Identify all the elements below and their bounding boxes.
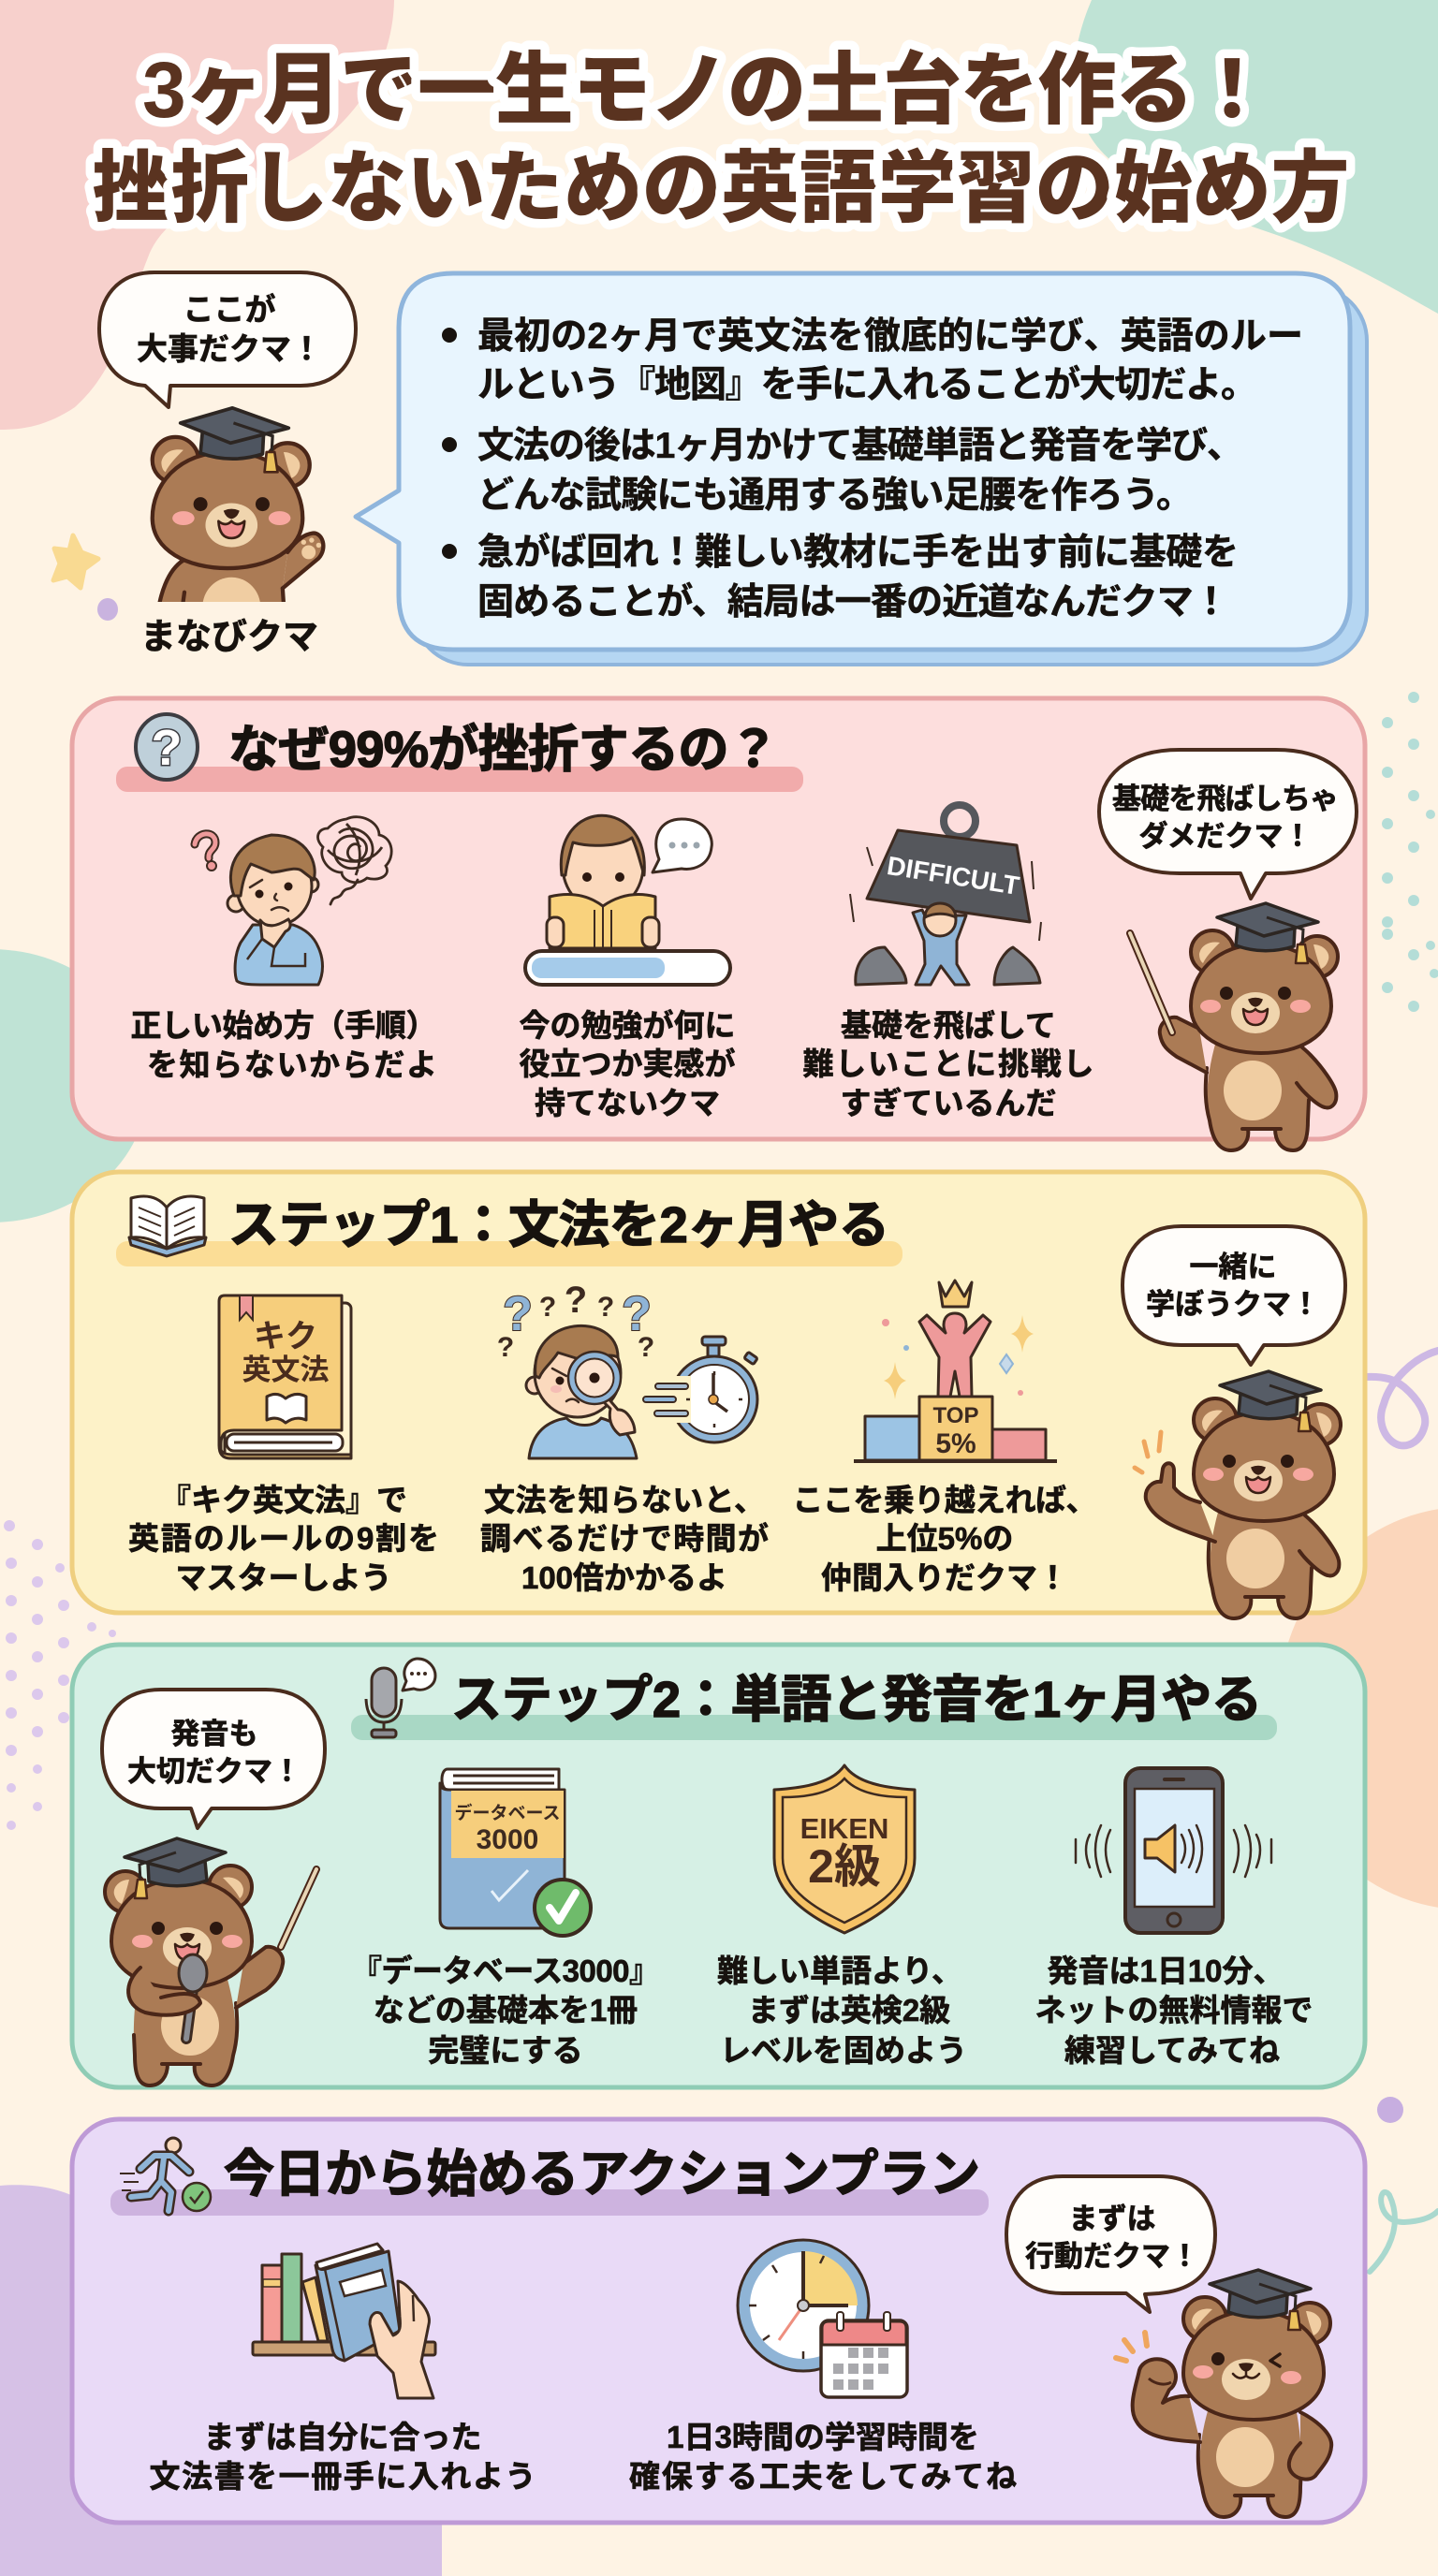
heading ribbon <box>110 2189 989 2216</box>
bear thumbs up <box>1135 1371 1341 1618</box>
heading: ステップ1：文法を2ヶ月やる <box>228 1197 889 1253</box>
text: vocab tip 1: 完璧にする <box>428 2033 583 2068</box>
icon: person with magnifier and stopwatch: ? <box>497 1332 514 1363</box>
text: vocab tip 3 <box>1035 1954 1313 2068</box>
panel: step 2 vocabulary and pronunciation <box>72 1645 1365 2087</box>
background dot: lilac small <box>97 598 118 621</box>
text: action 2 <box>629 2420 1017 2494</box>
background squiggle: purple <box>1365 1351 1438 1445</box>
heading: ステップ2：単語と発音を1ヶ月やる <box>451 1672 1262 1728</box>
text: cause 1: 正しい始め方（手順） <box>131 1008 436 1043</box>
bullet 1: 最初の2ヶ月で英文法を徹底的に学び、英語のルー <box>477 316 1303 357</box>
background blob: green left <box>0 949 148 1222</box>
text: grammar tip 1: マスターしよう <box>176 1560 391 1595</box>
text: action 1: まずは自分に合った <box>204 2420 481 2454</box>
title: 3ヶ月で一生モノの土台を作る！ <box>142 46 1271 134</box>
bear: まなびクマ <box>150 406 326 602</box>
icon: question mark <box>136 714 198 780</box>
text: grammar tip 3: 仲間入りだクマ！ <box>821 1560 1068 1595</box>
icon: EIKEN shield: EIKEN <box>800 1812 888 1845</box>
text: cause 3 <box>803 1008 1093 1120</box>
icon: データベース3000 book <box>440 1769 591 1936</box>
background dots: teal <box>1382 692 1438 1012</box>
text: grammar tip 1: 英語のルールの9割を <box>128 1521 439 1556</box>
bear with microphone and pointer <box>105 1838 316 2086</box>
icon: データベース3000 book: データベース <box>454 1802 561 1823</box>
text: vocab tip 2: 難しい単語より、 <box>717 1954 962 1988</box>
title <box>92 46 1350 232</box>
heading: なぜ99%が挫折するの？ <box>228 722 779 778</box>
icon: microphone <box>366 1659 435 1737</box>
text: vocab tip 1: などの基礎本を1冊 <box>374 1993 638 2027</box>
bullet 1 <box>442 316 1303 405</box>
bullet 3 <box>442 533 1239 622</box>
text: cause 2: 今の勉強が何に <box>519 1008 736 1043</box>
bullet 2: 文法の後は1ヶ月かけて基礎単語と発音を学び、 <box>477 426 1243 466</box>
speech bubble: 発音も <box>170 1718 258 1750</box>
icon: person with magnifier and stopwatch <box>497 1280 757 1458</box>
icon: confused person <box>195 817 391 985</box>
icon: person with magnifier and stopwatch: ? <box>539 1292 556 1323</box>
speech bubble: 行動だクマ！ <box>1025 2240 1199 2273</box>
text: cause 3: 基礎を飛ばして <box>841 1008 1056 1043</box>
icon: person lifting DIFFICULT weight <box>850 805 1041 985</box>
icon: open book <box>129 1196 206 1256</box>
text: grammar tip 1 <box>128 1483 439 1595</box>
icon: podium top 5% <box>854 1281 1057 1461</box>
name label: まなびクマ <box>140 618 318 657</box>
panel: why 99% fail <box>72 698 1365 1150</box>
text: grammar tip 2 <box>480 1483 769 1595</box>
background squiggle: teal <box>1370 2192 1438 2272</box>
icon: clock and calendar <box>738 2240 907 2397</box>
text: cause 3: 難しいことに挑戦し <box>803 1046 1093 1081</box>
icon: person with magnifier and stopwatch: ? <box>503 1287 533 1341</box>
text: cause 1 <box>131 1008 437 1082</box>
title: 挫折しないための英語学習の始め方 <box>92 144 1350 232</box>
bullet 2: どんな試験にも通用する強い足腰を作ろう。 <box>477 476 1193 516</box>
icon: podium top 5%: 5% <box>935 1428 976 1459</box>
text: grammar tip 1: 『キク英文法』で <box>160 1483 407 1517</box>
speech bubble: 基礎を飛ばしちゃ <box>1112 783 1339 815</box>
heading ribbon <box>116 1241 902 1266</box>
icon: person with magnifier and stopwatch: ? <box>565 1280 587 1321</box>
background blob: pink <box>0 0 394 430</box>
speech bubble: ダメだクマ！ <box>1138 820 1313 853</box>
heading: 今日から始めるアクションプラン <box>224 2146 980 2203</box>
background blob: green top right <box>1075 0 1438 314</box>
bullet 3: 急がば回れ！難しい教材に手を出す前に基礎を <box>477 533 1239 573</box>
background dot: purple <box>1377 2097 1403 2123</box>
text: action 1 <box>150 2420 536 2494</box>
background blob: peach right <box>1278 1507 1438 1910</box>
icon: キク英文法 book: 英文法 <box>242 1354 330 1386</box>
icon: reading person with progress bar <box>525 815 730 985</box>
text: grammar tip 3: 上位5%の <box>876 1521 1013 1556</box>
speech bubble <box>1099 750 1357 899</box>
text: cause 1: を知らないからだよ <box>147 1047 437 1082</box>
speech bubble <box>102 1690 325 1828</box>
icon: EIKEN shield <box>774 1765 915 1933</box>
text: cause 3: すぎているんだ <box>841 1086 1056 1120</box>
speech bubble: ここが大事だクマ: ここが <box>183 292 275 327</box>
text: cause 2: 役立つか実感が <box>519 1046 736 1081</box>
text: vocab tip 2: まずは英検2級 <box>748 1993 950 2027</box>
text: vocab tip 1: 『データベース3000』 <box>351 1954 660 1988</box>
text: grammar tip 2: 文法を知らないと、 <box>484 1483 765 1517</box>
text: grammar tip 3 <box>792 1483 1097 1595</box>
text: vocab tip 3: 練習してみてね <box>1064 2033 1280 2068</box>
text: vocab tip 2: レベルを固めよう <box>720 2033 967 2068</box>
heading ribbon <box>351 1715 1277 1740</box>
text: grammar tip 2: 100倍かかるよ <box>521 1560 727 1595</box>
text: vocab tip 3: ネットの無料情報で <box>1035 1993 1313 2027</box>
speech bubble: ここが大事だクマ <box>99 272 356 407</box>
panel: step 1 grammar <box>72 1172 1365 1618</box>
speech bubble <box>1123 1226 1345 1365</box>
speech bubble: 一緒に <box>1189 1251 1277 1283</box>
icon: データベース3000 book: 3000 <box>477 1824 538 1855</box>
text: action 2: 確保する工夫をしてみてね <box>629 2459 1017 2494</box>
icon: person with magnifier and stopwatch: ? <box>622 1287 652 1341</box>
icon: phone with sound <box>1076 1768 1271 1933</box>
background blob: purple bottom <box>0 2185 442 2576</box>
text: action 2: 1日3時間の学習時間を <box>667 2420 979 2454</box>
speech bubble: 大切だクマ！ <box>127 1755 301 1788</box>
text: cause 2: 持てないクマ <box>535 1086 720 1120</box>
speech bubble: ここが大事だクマ: 大事だクマ！ <box>137 331 322 366</box>
bear flexing with wink <box>1116 2270 1331 2517</box>
heading ribbon <box>116 767 803 792</box>
background dots: lilac <box>4 1520 116 1830</box>
bullet 2 <box>442 426 1243 516</box>
icon: キク英文法 book: キク <box>254 1319 317 1354</box>
icon: EIKEN shield: 2級 <box>808 1840 881 1893</box>
text: vocab tip 2 <box>717 1954 967 2068</box>
bullet 3: 固めることが、結局は一番の近道なんだクマ！ <box>477 582 1229 622</box>
icon: person with magnifier and stopwatch: ? <box>597 1292 614 1323</box>
text: vocab tip 1 <box>351 1954 660 2068</box>
icon: question mark: ? <box>152 720 182 776</box>
text: grammar tip 2: 調べるだけで時間が <box>480 1521 769 1556</box>
icon: runner with check <box>120 2138 211 2211</box>
text: grammar tip 3: ここを乗り越えれば、 <box>792 1483 1097 1517</box>
speech bubble: まずは <box>1069 2203 1155 2235</box>
icon: podium top 5%: TOP <box>933 1403 978 1428</box>
panel: summary box <box>356 273 1367 665</box>
text: cause 2 <box>519 1008 736 1120</box>
mascot intro: bear with speech bubble <box>99 272 356 657</box>
icon: キク英文法 book <box>219 1295 351 1458</box>
panel: action plan <box>72 2119 1365 2523</box>
icon: person with magnifier and stopwatch: ? <box>638 1332 654 1363</box>
bullet 1: ルという『地図』を手に入れることが大切だよ。 <box>477 365 1257 405</box>
speech bubble <box>1006 2176 1215 2312</box>
icon: books on shelf with hand <box>253 2244 435 2398</box>
bear with pointer <box>1130 903 1338 1150</box>
speech bubble: 学ぼうクマ！ <box>1146 1288 1320 1321</box>
icon: person lifting DIFFICULT weight: DIFFICULT <box>885 851 1021 900</box>
text: action 1: 文法書を一冊手に入れよう <box>150 2459 536 2494</box>
background star <box>53 535 98 588</box>
text: vocab tip 3: 発音は1日10分、 <box>1047 1954 1284 1988</box>
